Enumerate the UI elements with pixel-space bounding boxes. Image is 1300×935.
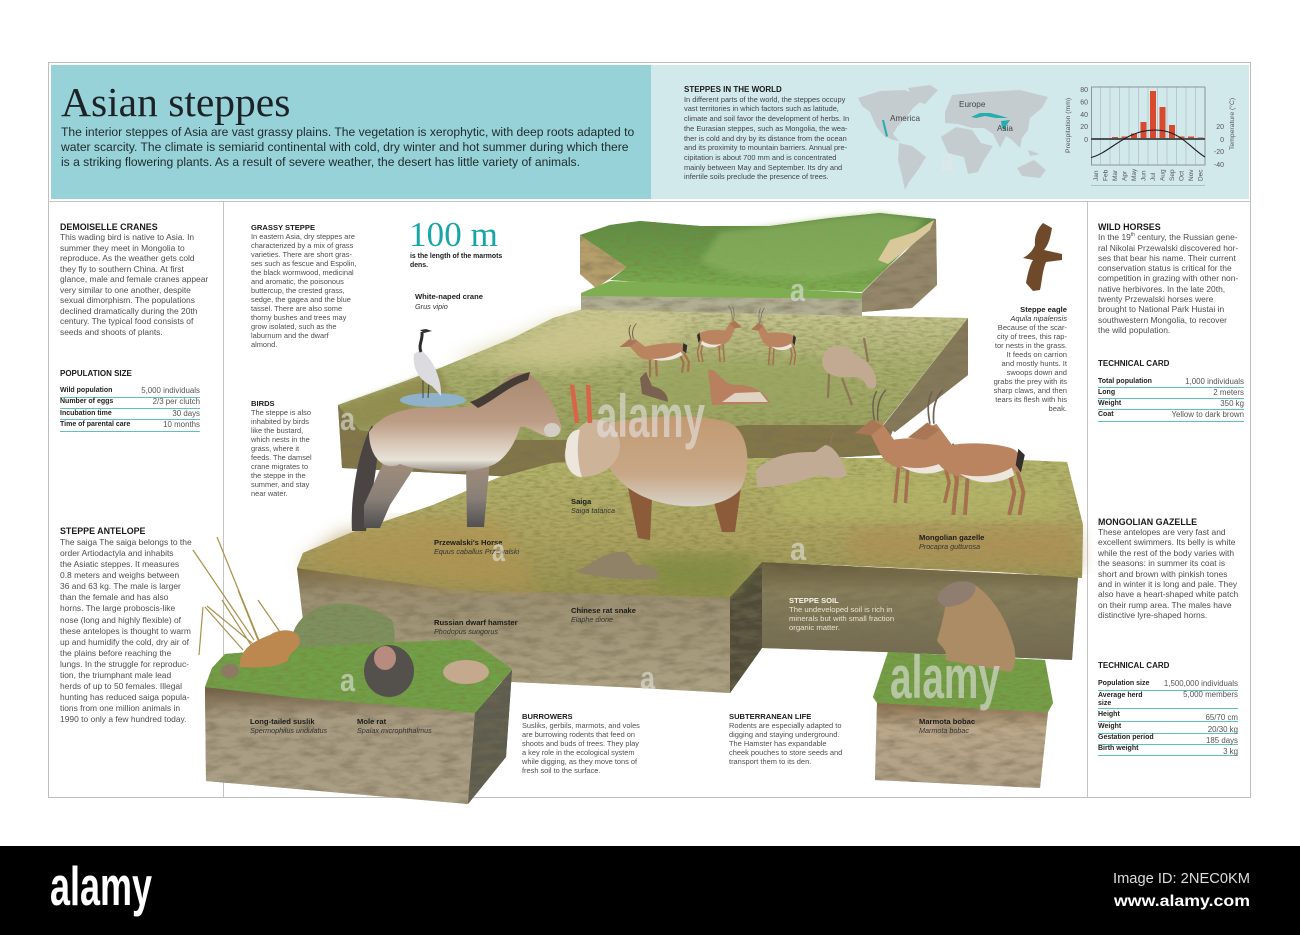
climate chart: Dec [1198, 169, 1204, 181]
mole rat [364, 645, 414, 697]
climate chart: Temperature (°C) [1228, 98, 1236, 150]
steppe soil text [789, 596, 894, 632]
birds text [251, 398, 312, 498]
birds text: like the bustard, [251, 426, 303, 434]
watermarks: a [340, 401, 355, 437]
label: saiga: Saiga tatarica [571, 506, 615, 515]
header panel: world background [651, 65, 1249, 199]
technical card: wild horses: Yellow to dark brown [1171, 410, 1244, 419]
grassy steppe text: varieties. There are short gras- [251, 250, 352, 258]
demoiselle cranes text: very similar to one another, despite [60, 285, 191, 295]
steppes in the world text: and its proximity to mountain barriers. Annual pre- [684, 143, 847, 152]
label: marmota bobac [919, 716, 975, 735]
steppe antelope text: 1990 to only a few hundred today. [60, 714, 186, 724]
climate chart: 0 [1220, 137, 1224, 144]
climate chart: -40 [1214, 162, 1224, 169]
grassy steppe text: characterized by a mix of grass [251, 240, 353, 250]
technical card: wild horses: 1,000 individuals [1185, 376, 1244, 386]
label: mole rat: Mole rat [357, 716, 386, 726]
steppe antelope text: The saiga The saiga belongs to the [60, 537, 192, 547]
wild horses text [1098, 222, 1238, 335]
steppes in the world text: cipitation is about 700 mm and is concentrated [684, 153, 836, 162]
wild horses text: conservation status is critical for the [1098, 263, 1232, 273]
steppe antelope text: 0.8 meters and weighs between [60, 570, 179, 580]
label: mole rat [357, 716, 432, 735]
climate chart: 80 [1080, 87, 1088, 94]
watermarks: a [790, 531, 806, 567]
birds text: near water. [251, 488, 288, 498]
climate chart: Oct [1178, 171, 1186, 181]
technical card: wild horses: 2 meters [1213, 388, 1244, 396]
label: chinese rat snake: Elaphe dione [571, 615, 613, 624]
map labels: Europe [959, 100, 986, 109]
label: white-naped crane: Grus vipio [415, 302, 448, 310]
population size table: 10 months [163, 420, 200, 429]
steppes in the world text: climate and soil favor the development of herbs. In [684, 114, 849, 123]
birds text: crane migrates to [251, 462, 308, 470]
label: saiga [571, 496, 615, 515]
steppe antelope text: the plains before reaching the [60, 648, 171, 658]
climate chart: 60 [1080, 100, 1088, 106]
suslik [221, 630, 300, 678]
label: white-naped crane: White-naped crane [415, 292, 483, 300]
technical card: wild horses: Total population [1098, 378, 1152, 384]
burrowers text: are burrowing rodents that feed on [522, 730, 635, 738]
Przewalski's horse [352, 372, 561, 531]
grassy steppe text [251, 222, 357, 348]
technical card: mongolian gazelle: size [1098, 700, 1111, 707]
mongolian gazelle text: the seasons: in summer its coat is [1098, 558, 1225, 568]
saiga antelope [565, 385, 747, 540]
terrain: distant hills [580, 213, 937, 318]
crane with pond [400, 329, 466, 407]
subterranean life text: digging and staying underground. [729, 730, 839, 738]
wild horses text: the wild population. [1098, 325, 1170, 335]
steppe eagle text: Aquila nipalensis [1010, 314, 1067, 322]
wild horses text: brought to National Park Hustai in [1098, 304, 1224, 314]
intro text: The interior steppes of Asia are vast grassy plains. The vegetation is xerophytic, with deep roots adapted to [61, 124, 634, 138]
steppe antelope text: 36 and 63 kg. The male is larger [60, 581, 181, 591]
label: saiga: Saiga [571, 496, 591, 506]
birds text: feeds. The damsel [251, 452, 312, 462]
steppe eagle text: swoops down and [1007, 368, 1067, 376]
climate chart: 40 [1080, 112, 1088, 119]
grassy steppe text: almond. [251, 340, 277, 348]
birds text: BIRDS [251, 398, 275, 408]
grassy steppe text: thorny bushes and trees may [251, 312, 346, 322]
mongolian gazelle text: short and brown with pinkish tones [1098, 569, 1227, 579]
grassy steppe text: tassel. There are also some [251, 304, 342, 312]
steppe antelope text: order Artiodactyla and inhabits [60, 548, 174, 558]
climate chart: 20 [1216, 124, 1224, 131]
demoiselle cranes text [60, 222, 208, 337]
label: chinese rat snake: Chinese rat snake [571, 606, 636, 614]
mongolian gazelle text: distinctive lyre-shaped horns. [1098, 610, 1207, 620]
steppe eagle text: beak. [1049, 404, 1067, 412]
watermarks: a [790, 272, 805, 308]
steppe antelope text: hunting has reduced saiga popula- [60, 692, 189, 702]
technical card: mongolian gazelle: 1,500,000 individuals [1164, 679, 1238, 688]
population size table: 5,000 individuals [141, 386, 200, 395]
wild horses text: ral Nikolai Przewalski discovered hor- [1098, 243, 1238, 253]
steppe eagle text [994, 304, 1067, 412]
world map [858, 85, 1048, 190]
watermarks: a [640, 660, 655, 696]
block: right soil sample [873, 652, 1053, 788]
steppe eagle text: It feeds on carrion [1007, 350, 1067, 358]
statistic caption [410, 252, 502, 268]
grassy steppe text: buttercup, the crested grass, [251, 286, 345, 294]
footer url: www.alamy.com [1113, 893, 1250, 910]
grassy steppe text: GRASSY STEPPE [251, 222, 315, 232]
gazelle herd [616, 306, 1025, 515]
footer logo: alamy [50, 855, 152, 917]
steppes in the world text [684, 85, 849, 181]
watermarks: alamy [890, 644, 1000, 711]
grassy steppe text: the black wormwood, medicinal [251, 268, 354, 276]
steppe soil text: STEPPE SOIL [789, 596, 839, 604]
demoiselle cranes text: glance, male and female cranes appear [60, 274, 208, 284]
birds text: summer, and stay [251, 480, 309, 488]
block: left soil sample [205, 640, 512, 804]
population size table: Time of parental care [60, 421, 130, 428]
table heading: TECHNICAL CARD [1098, 359, 1169, 368]
technical card: mongolian gazelle: 3 kg [1223, 746, 1238, 756]
label: mongolian gazelle: Procapra gutturosa [919, 542, 980, 551]
demoiselle cranes text: seeds and shoots of plants. [60, 327, 163, 337]
demoiselle cranes text: declined dramatically during the 20th [60, 306, 197, 316]
map labels: America [890, 114, 920, 123]
label: long-tailed suslik: Long-tailed suslik [250, 716, 315, 726]
population size table: Incubation time [60, 410, 112, 417]
reeds [193, 537, 280, 655]
grass tuft [290, 604, 395, 662]
wild horses text: southwestern Mongolia, to recover [1098, 315, 1227, 325]
label: white-naped crane [415, 292, 483, 310]
watermarks: a [492, 532, 505, 568]
grassy steppe text: In eastern Asia, dry steppes are [251, 232, 355, 240]
title: Asian steppes [61, 79, 290, 125]
header panel: intro background [51, 65, 651, 199]
steppe antelope text: tions from one million animals in [60, 703, 180, 713]
climate chart: -20 [1214, 149, 1224, 156]
grassy steppe text: sedge, the gagea and the blue [251, 294, 351, 304]
climate chart: Jun [1140, 170, 1148, 181]
technical card: mongolian gazelle: 20/30 kg [1208, 724, 1238, 734]
table heading: TECHNICAL CARD [1098, 661, 1169, 670]
steppes in the world text: ther is cold and dry by its distance from the ocean [684, 134, 847, 143]
intro text: water scarcity. The climate is semiarid continental with cold, dry winter and hot summer during which there [61, 140, 629, 154]
climate chart: 20 [1080, 124, 1088, 131]
label: marmota bobac: Marmota bobac [919, 726, 969, 735]
steppe eagle text: tears its flesh with his [995, 394, 1067, 404]
steppe eagle text: Steppe eagle [1020, 304, 1067, 314]
steppe eagle text: tor nests in the grass. [995, 340, 1067, 350]
label: przewalski's horse [434, 538, 520, 556]
footer image id: Image ID: 2NEC0KM [1113, 870, 1250, 887]
label: russian dwarf hamster [434, 618, 518, 636]
steppe eagle text: city of trees, this rap- [997, 332, 1067, 340]
technical card: mongolian gazelle: Population size [1098, 680, 1149, 687]
statistic caption: dens. [410, 262, 428, 268]
statistic: 100 m: 100 m [409, 215, 498, 254]
mongolian gazelle text: and in winter it is long and pale. They [1098, 579, 1237, 589]
technical card: mongolian gazelle: 5,000 members [1183, 690, 1238, 699]
technical card: wild horses: Coat [1098, 411, 1114, 418]
label: long-tailed suslik [250, 716, 327, 735]
steppe antelope text [60, 526, 192, 724]
terrain: middle plateau [338, 310, 968, 482]
burrowers text: shoots and buds of trees. They play [522, 738, 639, 748]
steppes in the world text: STEPPES IN THE WORLD [684, 85, 782, 94]
hamster [443, 660, 489, 684]
demoiselle cranes text: This wading bird is native to Asia. In [60, 232, 194, 242]
temperature curve [1091, 130, 1205, 158]
steppes in the world text: the Eurasian steppes, such as Mongolia, the wea- [684, 124, 848, 133]
technical card: mongolian gazelle: Average herd [1098, 692, 1142, 698]
demoiselle cranes text: summer they meet in Mongolia to [60, 243, 185, 253]
burrowers text [522, 712, 640, 774]
footer band [0, 846, 1300, 935]
mongolian gazelle text: MONGOLIAN GAZELLE [1098, 516, 1197, 526]
steppes in the world text: mainly between May and September. Its dry and [684, 163, 842, 172]
demoiselle cranes text: century. The typical food consists of [60, 316, 193, 326]
steppe antelope text: up and humidify the cold, dry air of [60, 637, 189, 647]
steppes in the world text: infertile soils preclude the presence of trees. [684, 172, 829, 181]
grassy steppe text: ses such as fescue and Espolin, [251, 258, 357, 268]
label: mongolian gazelle: Mongolian gazelle [919, 532, 984, 542]
climate chart: Nov [1188, 169, 1195, 181]
precipitation bars [1112, 91, 1204, 139]
mongolian gazelle text: while the rest of the body varies with [1098, 548, 1234, 558]
burrowers text: Susliks, gerbils, marmots, and voles [522, 720, 640, 730]
label: mongolian gazelle [919, 532, 984, 551]
snake [576, 552, 658, 580]
subterranean life text: Rodents are especially adapted to [729, 720, 841, 730]
birds text: the steppe in the [251, 470, 306, 480]
label: przewalski's horse: Equus caballus Przewalski [434, 547, 519, 556]
climate chart: May [1131, 168, 1138, 181]
burrowers text: fresh soil to the surface. [522, 766, 600, 774]
steppe soil text: organic matter. [789, 622, 840, 632]
map labels: Asia [997, 124, 1013, 133]
steppes in the world text: In different parts of the world, the steppes occupy [684, 95, 845, 104]
climate chart: Feb [1102, 169, 1110, 181]
climate chart: Mar [1112, 169, 1119, 181]
wild horses text: native herbivores. In the late 20th, [1098, 284, 1225, 294]
steppe antelope text: these antelopes is thought to warm [60, 626, 191, 636]
technical card: wild horses [1098, 359, 1244, 422]
demoiselle cranes text: DEMOISELLE CRANES [60, 222, 158, 232]
climate chart: 0 [1084, 137, 1088, 144]
eagle [1023, 223, 1062, 291]
burrowers text: while digging, as they move tons of [522, 756, 637, 766]
label: long-tailed suslik: Spermophilus undulatus [250, 726, 327, 735]
technical card: mongolian gazelle: Height [1098, 711, 1120, 718]
technical card: wild horses: Weight [1098, 400, 1121, 407]
intro text: is a striking flowering plants. As a result of severe weather, the desert has little variety of animals. [61, 154, 580, 168]
steppe antelope text: the Asiatic steppes. It measures [60, 559, 179, 569]
wild horses text: ses that bear his name. Their current [1098, 253, 1236, 263]
wild horses text: competition in grazing with other non- [1098, 273, 1238, 283]
steppe antelope text: horns. The large proboscis-like [60, 603, 175, 613]
technical card: mongolian gazelle: 65/70 cm [1206, 712, 1238, 722]
statistic caption: is the length of the marmots [410, 252, 502, 260]
subterranean life text: The Hamster has expandable [729, 738, 827, 748]
climate chart: Aug [1160, 169, 1166, 181]
steppe eagle text: grabs the prey with its [994, 376, 1067, 386]
watermarks: alamy [596, 383, 705, 450]
steppe eagle text: Because of the scar- [998, 322, 1067, 332]
steppe eagle text: and mostly hunts. It [1002, 358, 1067, 368]
intro text [61, 124, 634, 168]
steppe antelope text: tion, the triumphant male lead [60, 670, 171, 680]
steppe antelope text: lungs. In the struggle for reproduc- [60, 659, 189, 669]
birds text: grass, where it [251, 444, 299, 452]
birds text: inhabited by birds [251, 416, 309, 426]
climate chart: Jul [1150, 172, 1157, 181]
terrain: front plateau [297, 458, 1083, 693]
label: marmota bobac: Marmota bobac [919, 716, 975, 726]
table heading: POPULATION SIZE [60, 369, 132, 378]
steppe antelope text: STEPPE ANTELOPE [60, 526, 145, 536]
population size table: Number of eggs [60, 398, 113, 405]
technical card: wild horses: 350 kg [1220, 399, 1244, 408]
climate chart: Precipitation (mm) [1065, 98, 1072, 153]
label: chinese rat snake [571, 606, 636, 624]
population size table: 30 days [172, 409, 200, 418]
mongolian gazelle text: excellent swimmers. Its belly is white [1098, 537, 1235, 547]
mongolian gazelle text: also have a heart-shaped white patch [1098, 589, 1238, 599]
watermarks: a [340, 662, 355, 698]
map highlight: steppe regions [882, 113, 1010, 137]
subterranean life text [729, 712, 842, 766]
mongolian gazelle text: These antelopes are very fast and [1098, 527, 1226, 537]
steppe antelope text: herds of up to 50 females. Illegal [60, 681, 182, 691]
technical card: mongolian gazelle: 185 days [1206, 736, 1238, 744]
label: russian dwarf hamster: Phodopus sungorus [434, 627, 498, 636]
burrowers text: a key role in the ecological system [522, 748, 635, 756]
subterranean life text: transport them to its den. [729, 756, 811, 766]
population size table: Wild population [60, 387, 112, 394]
mongolian gazelle text: on their rump area. The males have [1098, 600, 1232, 610]
climate chart: Apr [1122, 170, 1128, 181]
wild horses text: In the 19th century, the Russian gene- [1098, 232, 1238, 242]
technical card: mongolian gazelle: Gestation period [1098, 734, 1154, 741]
subterranean life text: cheek pouches to store seeds and [729, 748, 842, 756]
technical card: mongolian gazelle [1098, 661, 1238, 756]
watermarks: a [940, 142, 954, 178]
climate chart: Sep [1169, 169, 1176, 181]
steppe antelope text: nose (long and highly flexible) of [60, 614, 181, 624]
steppe antelope text: than the female and has also [60, 592, 168, 602]
birds text: which nests in the [251, 434, 310, 444]
population size table [60, 369, 200, 432]
grassy steppe text: and aromatic, the poisonous [251, 276, 344, 286]
burrowers text: BURROWERS [522, 712, 573, 720]
technical card: mongolian gazelle: Birth weight [1098, 745, 1138, 752]
label: przewalski's horse: Przewalski's Horse [434, 538, 502, 546]
map labels [890, 100, 1013, 133]
climate chart [1065, 87, 1236, 186]
technical card: mongolian gazelle: Weight [1098, 723, 1121, 730]
wild horses text: twenty Przewalski horses were [1098, 294, 1213, 304]
demoiselle cranes text: reproduce. As the weather gets cold [60, 253, 195, 263]
marmot [937, 581, 1015, 672]
technical card: wild horses: Long [1098, 388, 1115, 396]
steppes in the world text: vast territories in which factors such as latitude, [684, 104, 839, 113]
label: mole rat: Spalax microphthalmus [357, 726, 432, 735]
watermarks [340, 142, 1000, 711]
wild horses text: WILD HORSES [1098, 222, 1161, 232]
grassy steppe text: grow isolated, such as the [251, 322, 336, 330]
steppe soil text: minerals but with small fraction [789, 614, 894, 622]
steppe soil text: The undeveloped soil is rich in [789, 604, 892, 614]
birds text: The steppe is also [251, 408, 311, 416]
grassy steppe text: laburnum and the dwarf [251, 330, 329, 340]
steppe eagle text: sharp claws, and then [994, 386, 1067, 394]
label: russian dwarf hamster: Russian dwarf hamster [434, 618, 518, 626]
subterranean life text: SUBTERRANEAN LIFE [729, 712, 811, 720]
demoiselle cranes text: sexual dimorphism. The populations [60, 295, 195, 305]
watermark fade on white text areas [60, 262, 1148, 710]
climate chart: Jan [1093, 170, 1100, 181]
mongolian gazelle text [1098, 516, 1238, 620]
demoiselle cranes text: they fly to southern China. At first [60, 264, 184, 274]
population size table: 2/3 per clutch [153, 397, 200, 406]
